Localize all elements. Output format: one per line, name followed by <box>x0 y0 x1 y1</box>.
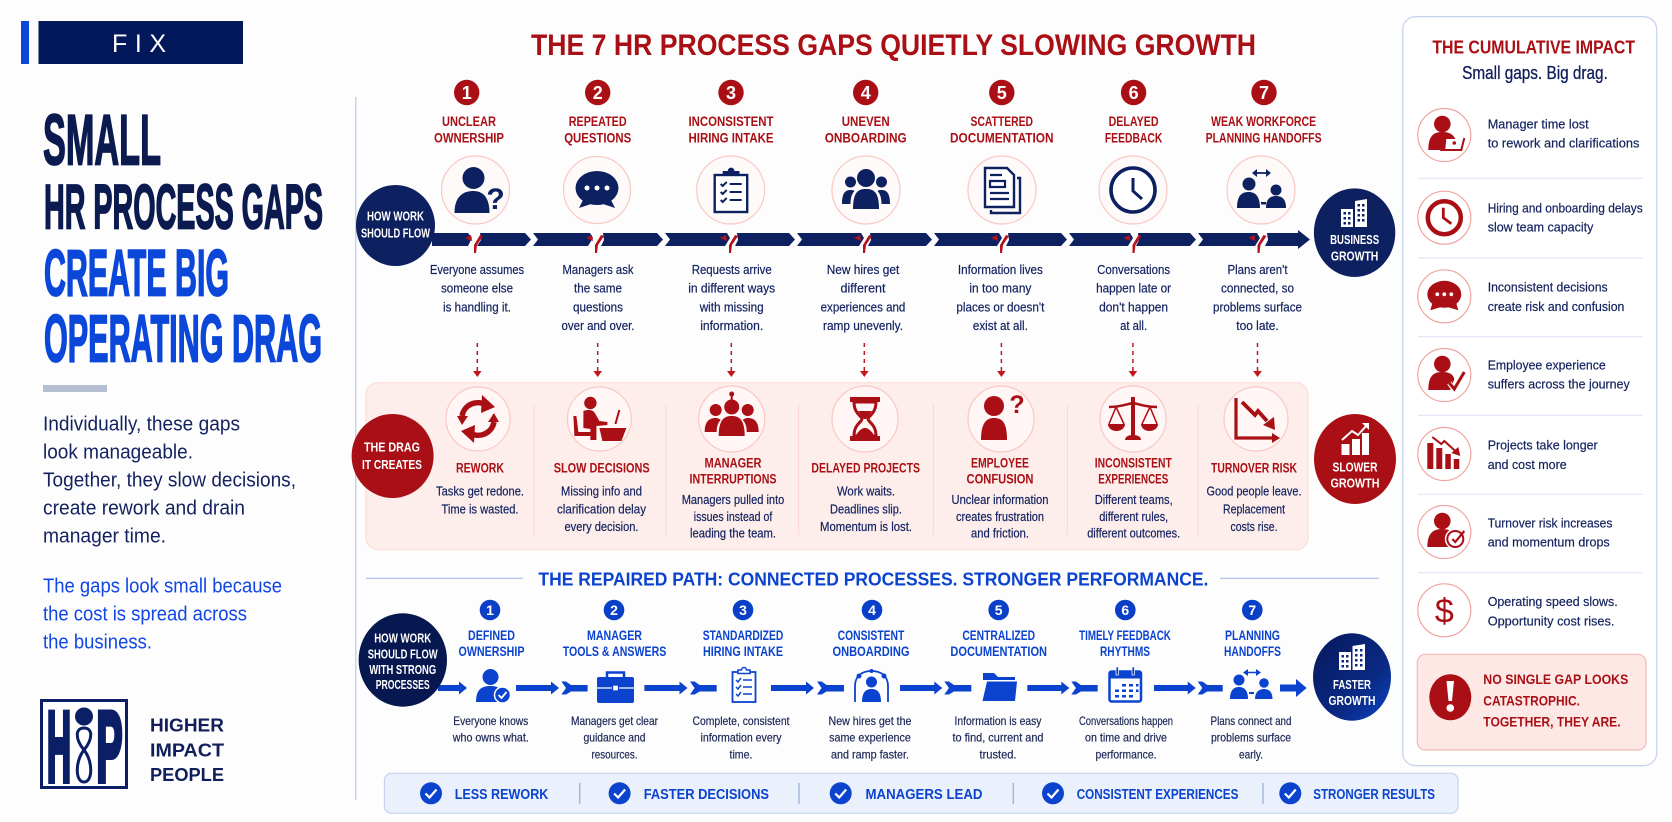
gap 2: repeated questions: questions <box>573 300 623 314</box>
outcome: stronger results: STRONGER RESULTS <box>1313 787 1435 803</box>
impact 7: operating speed slows: Opportunity cost rises. <box>1488 614 1614 629</box>
gap 6: delayed feedback <box>1096 80 1171 333</box>
gap 1: unclear ownership: UNCLEAR <box>442 114 496 129</box>
icon: clock <box>1099 156 1167 224</box>
gap 5: scattered documentation: exist at all. <box>973 319 1028 333</box>
gap 6: delayed feedback: DELAYED <box>1109 114 1159 129</box>
impact 3: inconsistent decisions: Inconsistent decisions <box>1488 280 1608 295</box>
fix 6: timely feedback rhythms: on time and drive <box>1085 731 1167 745</box>
gap 3: inconsistent hiring intake <box>688 80 775 333</box>
icon: person with question: ? <box>486 183 505 216</box>
icon: person with check <box>476 669 510 703</box>
drag 5: employee confusion: Unclear information <box>952 493 1049 507</box>
gap 4: uneven onboarding: ramp unevenly. <box>823 319 903 333</box>
main title: THE 7 HR PROCESS GAPS QUIETLY SLOWING GROWTH <box>531 29 1256 62</box>
gap 4: uneven onboarding: experiences and <box>821 300 905 314</box>
drag node: IT CREATES <box>362 458 422 472</box>
fix 3: standardized hiring intake <box>692 600 790 761</box>
gap 5: scattered documentation: Information lives <box>958 263 1043 277</box>
gap 1: unclear ownership: is handling it. <box>443 300 511 314</box>
logo: Higher Impact People: IMPACT <box>150 740 224 760</box>
fix 3: standardized hiring intake: HIRING INTAKE <box>703 644 783 659</box>
end node: slower growth <box>1314 414 1396 504</box>
gap 2: repeated questions: the same <box>574 282 622 296</box>
repaired flow arrows <box>438 679 1307 697</box>
icon: team <box>832 156 900 224</box>
start node: how work should flow with strong processes: WITH STRONG <box>369 663 436 677</box>
impact 5: projects take longer: Projects take longer <box>1488 437 1598 452</box>
text: OPERATING DRAG <box>44 302 322 376</box>
gap 2: repeated questions <box>562 80 634 333</box>
callout: no single gap looks catastrophic <box>1417 654 1646 750</box>
drag 7: turnover risk: TURNOVER RISK <box>1211 461 1297 476</box>
gap 5: scattered documentation: SCATTERED <box>971 114 1033 129</box>
icon: chat bubble <box>564 156 630 224</box>
drag 6: inconsistent experiences <box>1087 386 1180 541</box>
icon: onboarding person <box>855 669 888 702</box>
gap 4: uneven onboarding: 4 <box>861 83 871 103</box>
fix 4: consistent onboarding: ONBOARDING <box>832 644 910 659</box>
impact 3: inconsistent decisions: create risk and confusion <box>1488 299 1624 314</box>
drag 4: delayed projects: Momentum is lost. <box>820 520 912 534</box>
tag: FIX: FIX <box>112 30 166 58</box>
gap 5: scattered documentation: in too many <box>969 282 1032 296</box>
panel: the cumulative impact <box>1403 17 1657 766</box>
fix 7: planning handoffs: HANDOFFS <box>1224 644 1281 659</box>
drag 6: inconsistent experiences: INCONSISTENT <box>1095 455 1172 470</box>
heading: the repaired path: THE REPAIRED PATH: CONNECTED PROCESSES. STRONGER PERFORMANCE. <box>538 569 1208 590</box>
icon: hourglass <box>832 386 898 452</box>
fix 3: standardized hiring intake: STANDARDIZED <box>703 628 783 643</box>
drag 5: employee confusion: CONFUSION <box>966 471 1034 486</box>
fix 2: manager tools and answers: 2 <box>610 602 618 618</box>
gap 7: weak workforce planning handoffs: problems surface <box>1213 300 1302 314</box>
gap 3: inconsistent hiring intake: in different ways <box>688 282 775 296</box>
fix 2: manager tools and answers: resources. <box>592 747 638 761</box>
fix 2: manager tools and answers: guidance and <box>584 731 646 745</box>
blue note: the business. <box>43 632 152 654</box>
icon: clipboard <box>732 668 756 702</box>
logo: Higher Impact People: P <box>96 691 122 802</box>
outcome: faster decisions: FASTER DECISIONS <box>644 787 769 803</box>
start node: how work should flow: HOW WORK <box>367 210 424 224</box>
gap 1: unclear ownership: Everyone assumes <box>430 263 524 277</box>
start node: how work should flow: SHOULD FLOW <box>361 226 430 240</box>
callout: no single gap looks catastrophic: CATASTROPHIC. <box>1483 692 1580 708</box>
drag 6: inconsistent experiences: different outcomes. <box>1087 527 1180 541</box>
logo: Higher Impact People: HIGHER <box>150 716 224 736</box>
icon: clock <box>1418 191 1471 244</box>
gap 4: uneven onboarding <box>821 80 907 333</box>
gap 4: uneven onboarding: UNEVEN <box>842 114 890 129</box>
fix 6: timely feedback rhythms: 6 <box>1121 602 1129 618</box>
impact 5: projects take longer <box>1418 428 1598 480</box>
icon: calendar <box>1110 667 1141 702</box>
icon: falling chart <box>1224 387 1288 451</box>
outcome: consistent experiences <box>1042 782 1239 804</box>
gap 7: weak workforce planning handoffs: connected, so <box>1221 282 1294 296</box>
icon: person at desk <box>567 387 631 451</box>
body text <box>43 414 296 548</box>
impact 7: operating speed slows: Operating speed slows. <box>1488 594 1618 609</box>
icon: confused employee: ? <box>1009 391 1025 419</box>
fix 7: planning handoffs: 7 <box>1248 602 1256 618</box>
gap 6: delayed feedback: don't happen <box>1099 300 1168 314</box>
gap 7: weak workforce planning handoffs: 7 <box>1259 83 1269 103</box>
end node: slower growth: SLOWER <box>1332 461 1378 475</box>
fix 4: consistent onboarding: 4 <box>868 602 876 618</box>
drag 4: delayed projects: Deadlines slip. <box>830 502 902 516</box>
fix 4: consistent onboarding: same experience <box>829 731 911 745</box>
impact 1: manager time lost <box>1418 108 1640 162</box>
fix 2: manager tools and answers: TOOLS & ANSWERS <box>563 644 666 659</box>
outcome: consistent experiences: CONSISTENT EXPERIENCES <box>1077 787 1239 803</box>
impact 5: projects take longer: and cost more <box>1488 457 1567 472</box>
fix 1: defined ownership: who owns what. <box>452 731 529 745</box>
drag 7: turnover risk: costs rise. <box>1230 520 1278 534</box>
fix 7: planning handoffs <box>1210 600 1292 761</box>
icon: clipboard checklist <box>697 156 765 224</box>
fix 6: timely feedback rhythms: performance. <box>1096 747 1156 761</box>
fix 3: standardized hiring intake: Complete, consistent <box>692 714 790 728</box>
impact 4: employee experience <box>1418 348 1630 402</box>
gap 7: weak workforce planning handoffs: WEAK WORKFORCE <box>1211 114 1316 129</box>
gap 3: inconsistent hiring intake: Requests arrive <box>692 263 772 277</box>
fix 1: defined ownership: OWNERSHIP <box>458 644 524 659</box>
logo: Higher Impact People <box>42 691 224 802</box>
drag 1: rework: Tasks get redone. <box>436 485 524 499</box>
drag 2: slow decisions <box>554 387 650 534</box>
body text: look manageable. <box>43 442 193 464</box>
gap 4: uneven onboarding: New hires get <box>827 263 900 277</box>
panel: the cumulative impact: THE CUMULATIVE IMPACT <box>1432 37 1635 57</box>
fix 1: defined ownership: 1 <box>486 602 494 618</box>
icon: circular arrows <box>446 387 510 451</box>
drag 2: slow decisions: every decision. <box>564 520 638 534</box>
fix 7: planning handoffs: problems surface <box>1211 731 1291 745</box>
drag 7: turnover risk: Replacement <box>1223 502 1285 516</box>
callout: no single gap looks catastrophic: NO SINGLE GAP LOOKS <box>1483 671 1628 687</box>
impact 1: manager time lost: Manager time lost <box>1488 116 1589 131</box>
fix 5: centralized documentation: Information is easy <box>954 714 1042 728</box>
logo: Higher Impact People: H <box>47 691 71 802</box>
fix 2: manager tools and answers <box>563 600 666 761</box>
start node: how work should flow with strong processes: PROCESSES <box>376 678 430 692</box>
panel: the drag it creates <box>352 383 1308 550</box>
headline: CREATE BIG <box>44 236 229 310</box>
drag 1: rework <box>436 387 524 516</box>
icon: person with question <box>442 156 510 224</box>
impact 2: hiring and onboarding delays: Hiring and onboarding delays <box>1488 200 1643 215</box>
drag 7: turnover risk: Good people leave. <box>1206 485 1302 499</box>
icon: documents <box>968 156 1036 224</box>
headline: SMALL <box>43 102 161 180</box>
fix 6: timely feedback rhythms: Conversations happen <box>1079 714 1173 728</box>
fix 5: centralized documentation: CENTRALIZED <box>962 628 1035 643</box>
fix 5: centralized documentation: trusted. <box>980 747 1016 761</box>
drag 2: slow decisions: Missing info and <box>561 485 642 499</box>
icon: person with laptop <box>1418 108 1471 162</box>
body text: Together, they slow decisions, <box>43 470 296 492</box>
icon: people handoff <box>1230 669 1272 699</box>
blue note <box>43 576 282 654</box>
impact 3: inconsistent decisions <box>1418 270 1624 323</box>
panel: the cumulative impact: Small gaps. Big drag. <box>1462 63 1608 83</box>
fix 4: consistent onboarding: CONSISTENT <box>838 628 905 643</box>
fix 5: centralized documentation: DOCUMENTATION <box>950 644 1047 659</box>
gap 5: scattered documentation: DOCUMENTATION <box>950 131 1054 146</box>
gap 2: repeated questions: Managers ask <box>562 263 634 277</box>
drag 3: manager interruptions <box>682 386 784 541</box>
text: HR PROCESS GAPS <box>44 172 323 242</box>
drag 3: manager interruptions: Managers pulled into <box>682 493 784 507</box>
impact 2: hiring and onboarding delays: slow team capacity <box>1488 220 1594 235</box>
logo: Higher Impact People: PEOPLE <box>150 765 224 785</box>
gap 5: scattered documentation: 5 <box>997 83 1007 103</box>
outcome: managers lead: MANAGERS LEAD <box>866 787 982 803</box>
fix 4: consistent onboarding: and ramp faster. <box>831 747 909 761</box>
drag 5: employee confusion: creates frustration <box>956 510 1044 524</box>
outcome: managers lead <box>830 782 982 804</box>
fix 7: planning handoffs: PLANNING <box>1225 628 1280 643</box>
icon: declining bars <box>1418 428 1471 480</box>
fix 2: manager tools and answers: Managers get clear <box>571 714 658 728</box>
drag 2: slow decisions: SLOW DECISIONS <box>554 461 650 476</box>
drag 5: employee confusion: and friction. <box>971 527 1029 541</box>
end node: slower growth: GROWTH <box>1330 477 1380 491</box>
impact 6: turnover risk increases: Turnover risk increases <box>1488 515 1613 530</box>
fix 1: defined ownership: Everyone knows <box>453 714 528 728</box>
fix 5: centralized documentation: 5 <box>995 602 1003 618</box>
tag: FIX <box>21 21 243 64</box>
fix 7: planning handoffs: early. <box>1239 747 1263 761</box>
flow arrow: broken process band <box>432 230 1310 253</box>
drag 3: manager interruptions: issues instead of <box>694 510 773 524</box>
gap 6: delayed feedback: 6 <box>1129 83 1139 103</box>
start node: how work should flow <box>356 185 435 266</box>
fix 6: timely feedback rhythms: RHYTHMS <box>1100 644 1150 659</box>
gap 4: uneven onboarding: different <box>840 282 886 296</box>
end node: faster growth <box>1313 633 1391 721</box>
icon: dollar: $ <box>1435 592 1454 630</box>
gap 2: repeated questions: REPEATED <box>569 114 627 129</box>
blue note: The gaps look small because <box>43 576 282 598</box>
gap 3: inconsistent hiring intake: 3 <box>726 83 736 103</box>
blue note: the cost is spread across <box>43 604 247 626</box>
gap 2: repeated questions: over and over. <box>562 319 634 333</box>
drag 6: inconsistent experiences: EXPERIENCES <box>1098 471 1168 486</box>
fix 1: defined ownership <box>452 600 529 745</box>
fix 2: manager tools and answers: MANAGER <box>587 628 642 643</box>
gap 1: unclear ownership: 1 <box>462 83 472 103</box>
end node: faster growth: FASTER <box>1333 678 1371 692</box>
start node: how work should flow with strong processes: SHOULD FLOW <box>368 648 438 662</box>
fix 5: centralized documentation: to find, current and <box>952 731 1044 745</box>
gap 5: scattered documentation: places or doesn't <box>956 300 1045 314</box>
drag 5: employee confusion <box>952 386 1049 541</box>
gap 7: weak workforce planning handoffs: Plans aren't <box>1228 263 1288 277</box>
start node: how work should flow with strong processes <box>359 613 447 707</box>
gap 7: weak workforce planning handoffs: PLANNING HANDOFFS <box>1206 131 1322 146</box>
impact 4: employee experience: suffers across the journey <box>1488 377 1630 392</box>
end node: business growth <box>1314 188 1395 277</box>
panel: left column <box>21 21 323 802</box>
impact 4: employee experience: Employee experience <box>1488 357 1606 372</box>
end node: faster growth: GROWTH <box>1328 694 1376 708</box>
outcome: less rework: LESS REWORK <box>455 787 549 803</box>
icon: confused employee <box>968 386 1034 452</box>
gap 7: weak workforce planning handoffs: too late. <box>1236 319 1279 333</box>
outcomes bar <box>384 773 1458 813</box>
gap 3: inconsistent hiring intake: HIRING INTAKE <box>688 131 774 146</box>
drag 4: delayed projects: Work waits. <box>837 485 895 499</box>
drag 1: rework: REWORK <box>456 461 504 476</box>
drag 4: delayed projects: DELAYED PROJECTS <box>811 461 920 476</box>
body text: manager time. <box>43 526 166 548</box>
fix 3: standardized hiring intake: 3 <box>739 602 747 618</box>
drag 3: manager interruptions: INTERRUPTIONS <box>690 471 776 486</box>
fix 4: consistent onboarding <box>828 600 912 761</box>
drag 3: manager interruptions: MANAGER <box>704 455 762 470</box>
icon: folder <box>982 673 1017 701</box>
callout: no single gap looks catastrophic: TOGETHER, THEY ARE. <box>1483 714 1621 730</box>
icon: dollar <box>1418 584 1471 637</box>
outcome: faster decisions <box>609 782 769 804</box>
gap 1: unclear ownership: someone else <box>441 282 513 296</box>
fix 1: defined ownership: DEFINED <box>468 628 515 643</box>
fix 3: standardized hiring intake: time. <box>730 747 752 761</box>
icon: person with target <box>1418 506 1471 558</box>
drag 3: manager interruptions: leading the team. <box>690 527 776 541</box>
icon: briefcase <box>597 672 634 703</box>
gap 6: delayed feedback: happen late or <box>1096 282 1171 296</box>
gap 3: inconsistent hiring intake: information. <box>700 319 763 333</box>
drag 1: rework: Time is wasted. <box>442 502 518 516</box>
gap 6: delayed feedback: FEEDBACK <box>1105 131 1163 146</box>
impact 1: manager time lost: to rework and clarifications <box>1488 136 1640 151</box>
drag node: THE DRAG <box>364 441 420 455</box>
gap 5: scattered documentation <box>950 80 1054 333</box>
fix 7: planning handoffs: Plans connect and <box>1210 714 1292 728</box>
drag 4: delayed projects <box>811 386 920 534</box>
headline <box>43 102 323 376</box>
impact 2: hiring and onboarding delays <box>1418 191 1643 244</box>
icon: chat <box>1418 270 1471 323</box>
drag 5: employee confusion: EMPLOYEE <box>971 455 1029 470</box>
fix 6: timely feedback rhythms <box>1079 600 1173 761</box>
gap 2: repeated questions: 2 <box>593 83 603 103</box>
gap 7: weak workforce planning handoffs <box>1206 80 1322 333</box>
fix 5: centralized documentation <box>950 600 1047 761</box>
arrows: gaps lead to drag <box>473 343 1262 377</box>
drag 7: turnover risk <box>1206 387 1302 534</box>
body text: create rework and drain <box>43 498 245 520</box>
gap 1: unclear ownership: OWNERSHIP <box>434 131 504 146</box>
gap 6: delayed feedback: at all. <box>1120 319 1147 333</box>
outcome: stronger results <box>1279 782 1435 804</box>
drag 6: inconsistent experiences: different rules, <box>1099 510 1168 524</box>
gap 3: inconsistent hiring intake: with missing <box>699 300 764 314</box>
fix 4: consistent onboarding: New hires get the <box>828 714 912 728</box>
icon: two people handoff <box>1227 156 1295 224</box>
drag 2: slow decisions: clarification delay <box>557 502 647 516</box>
icon: person with pencil <box>1418 348 1471 402</box>
gap 2: repeated questions: QUESTIONS <box>564 131 631 146</box>
gap 1: unclear ownership <box>430 80 524 314</box>
gap 4: uneven onboarding: ONBOARDING <box>825 131 907 146</box>
impact 6: turnover risk increases <box>1418 506 1613 558</box>
icon: exclamation <box>1429 674 1471 720</box>
icon: scales <box>1100 386 1166 452</box>
start node: how work should flow with strong processes: HOW WORK <box>374 632 431 646</box>
gap 6: delayed feedback: Conversations <box>1097 263 1170 277</box>
gap 3: inconsistent hiring intake: INCONSISTENT <box>688 114 774 129</box>
fix 6: timely feedback rhythms: TIMELY FEEDBACK <box>1079 628 1171 643</box>
drag node <box>352 414 434 498</box>
outcome: less rework <box>420 782 549 804</box>
impact 6: turnover risk increases: and momentum drops <box>1488 535 1610 550</box>
icon: manager group <box>699 386 765 452</box>
body text: Individually, these gaps <box>43 414 240 436</box>
drag 6: inconsistent experiences: Different teams, <box>1095 493 1173 507</box>
impact 7: operating speed slows <box>1418 584 1618 637</box>
end node: business growth: BUSINESS <box>1330 233 1379 247</box>
end node: business growth: GROWTH <box>1331 249 1378 263</box>
fix 3: standardized hiring intake: information every <box>700 731 782 745</box>
